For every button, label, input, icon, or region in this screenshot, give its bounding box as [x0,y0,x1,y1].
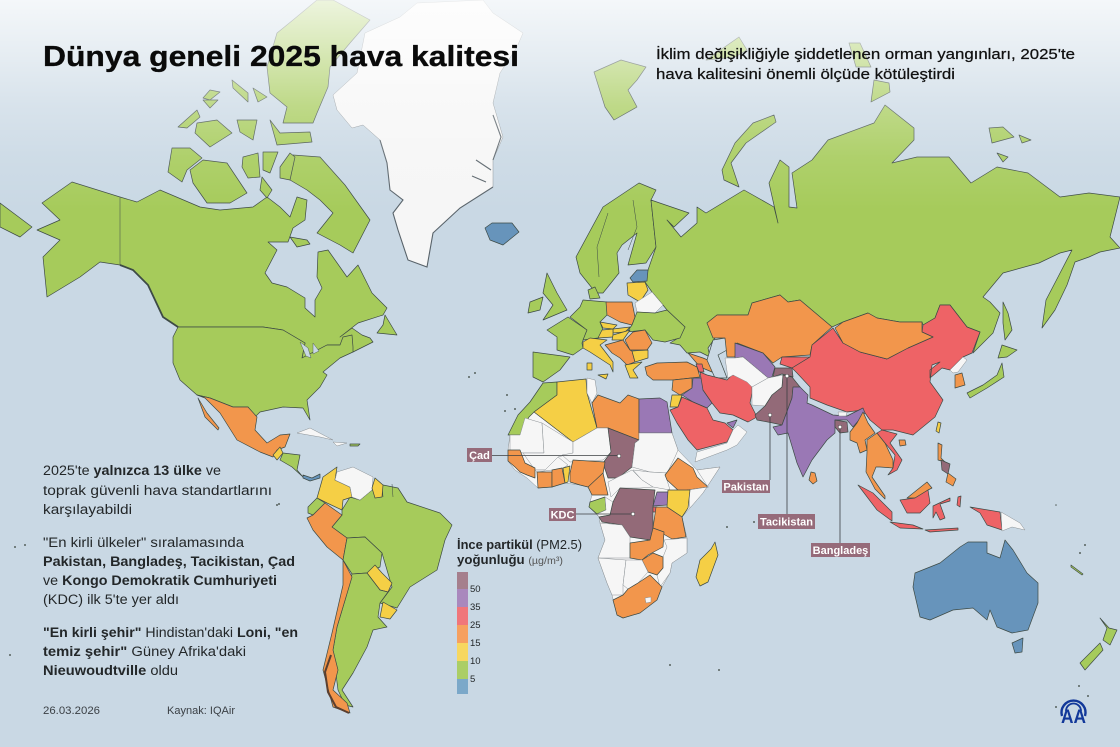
New Caledonia [1071,565,1083,575]
legend [457,537,582,694]
Papua New Guinea [1001,512,1025,531]
Saudi Arabia [670,397,733,450]
Kazakhstan [707,295,832,363]
Tunisia [587,378,597,403]
callout: Bangladeş: Bangladeş [813,545,868,557]
Estonia [630,270,648,282]
Southern Chile fjords [325,655,349,713]
Central African Republic [608,470,653,497]
Bangladesh [835,420,848,433]
Paraguay [367,565,392,592]
Sri Lanka [809,472,817,484]
Peru [307,503,347,560]
Baja California [198,398,219,430]
callout: Pakistan: Pakistan [723,482,769,494]
callout: Çad: Çad [469,450,490,462]
Libya [592,395,639,440]
Tasmania [1012,638,1023,653]
Greenland [333,0,523,267]
Argentina [333,573,388,707]
Papua [970,507,1002,530]
Pakistan [755,375,800,425]
Austria [598,329,613,338]
Ecuador [308,498,325,515]
Hungary [612,330,630,340]
callout: Bangladeş [811,425,870,557]
Slovakia [613,327,630,333]
region: North America [0,0,523,481]
Cuba [297,428,333,440]
Congo [597,497,613,517]
text block: 13 countries: 2025'te yalnızca 13 ülke ve [43,463,221,478]
subtitle [656,45,1075,83]
legend colour scale [457,572,468,694]
Egypt [639,398,672,433]
Venezuela [335,467,373,500]
Sumatra [858,485,892,521]
Kenya [667,490,690,517]
Mauritania [510,418,544,453]
subtitle: hava kalitesini önemli ölçüde kötüleştirdi [656,66,955,83]
legend values: 10 [470,656,481,667]
Chukotka edge [0,203,32,237]
Nordic countries [576,183,656,293]
Taiwan [936,422,941,433]
Java [890,522,923,529]
text block: most polluted countries [43,535,295,607]
Australia [913,540,1038,633]
legend values [470,584,481,685]
Poland [606,302,635,325]
region: Africa [508,378,720,618]
text block: 13 countries [43,463,272,517]
region: Europe [528,37,1120,382]
Zimbabwe [642,553,663,575]
Central America [280,453,303,477]
text block: most polluted and cleanest city: "En kirli şehir" Hindistan'daki Loni, "en [43,625,298,640]
Hainan [899,440,906,446]
Panama [303,474,320,481]
South Africa [613,575,662,618]
legend values: 5 [470,674,475,685]
UAE [727,420,737,428]
Uruguay [380,602,397,619]
callout: KDC [549,508,635,522]
Madagascar [696,542,718,586]
Africa white base [508,412,720,618]
Mali [523,423,573,470]
Chad [603,428,639,478]
Niger [562,428,611,462]
legend title: İnce partikül (PM2.5) [457,537,582,552]
Uzbekistan [735,343,775,378]
Romania [625,330,652,350]
Uganda [653,492,668,506]
Bhutan [838,412,847,416]
Arctic islands [168,0,370,253]
New Zealand [1080,618,1117,670]
Sudan [632,433,678,473]
Kyrgyzstan [780,357,810,368]
Morocco [508,382,557,435]
legend values: 35 [470,602,481,613]
Hudson islands [290,237,310,247]
Mongolia [835,313,933,359]
Vietnam [877,430,902,475]
Nigeria [570,460,605,487]
callout: Tacikistan: Tacikistan [760,516,813,528]
title: Dünya geneli 2025 hava kalitesi [43,41,519,73]
callout: Tacikistan [758,374,815,529]
Alaska panhandle coast [120,265,178,327]
Sakhalin [1003,302,1012,340]
Ghana [552,468,565,487]
Lesser Sunda Islands [925,528,958,532]
callout: Pakistan [722,413,772,494]
Lesotho [645,597,651,603]
Sulawesi [933,498,950,520]
Philippines [938,443,956,486]
legend title: yoğunluğu (µg/m³) [457,552,563,567]
Myanmar [850,412,875,453]
top fade overlay [0,0,1120,210]
Senegal and west coast [508,450,535,478]
Zambia [630,528,664,560]
text block: most polluted and cleanest city [43,625,298,678]
France [547,317,587,355]
Japan [967,345,1017,398]
Namibia [598,558,626,595]
Belarus [635,292,663,313]
United States [173,327,353,420]
text block: most polluted countries: "En kirli ülkeler" sıralamasında [43,535,245,550]
Iran [700,372,757,422]
Malaysian Borneo [907,482,932,498]
text block: most polluted and cleanest city: Nieuwoudtville oldu [43,663,178,678]
Balkans [605,340,635,365]
callout: Çad [467,448,621,462]
Jordan [670,395,682,407]
callout: KDC: KDC [551,510,574,522]
Thailand Laos Cambodia [866,433,893,499]
Guatemala [273,447,283,460]
text block: 13 countries: karşılayabildi [43,502,132,517]
South Sudan [633,470,670,490]
Greenland coast and fjords [380,115,501,267]
Mozambique [657,538,687,587]
Angola [598,523,630,558]
Afghanistan [752,375,783,406]
Newfoundland [377,315,397,335]
region: Oceania [913,540,1117,670]
legend values: 15 [470,638,481,649]
Benin [563,466,570,483]
Mexico [197,395,290,457]
text block: most polluted countries: Pakistan, Bangladeş, Tacikistan, Çad [43,554,295,569]
Denmark [588,287,600,299]
subtitle: İklim değişikliğiyle şiddetlenen orman yangınları, 2025'te [656,45,1075,63]
source: Kaynak: IQAir [167,705,235,717]
Ireland [528,297,543,313]
Germany and Benelux [570,300,607,340]
Turkmenistan [725,357,768,387]
North Korea [950,357,967,373]
Russia [645,105,1120,357]
Colombia [317,467,352,510]
region: South America [307,467,452,713]
China [792,305,980,435]
icon: AA logo: AA [1061,707,1086,728]
Bolivia [343,537,382,574]
Alaska and Canada [37,182,387,358]
Ukraine [627,310,685,342]
South Korea [955,373,965,388]
Brazil and Guianas [332,485,452,608]
Iberia [533,352,570,382]
legend values: 25 [470,620,481,631]
text block: most polluted countries: (KDC) ilk 5'te yer aldı [43,592,179,607]
Burkina Faso region [535,457,568,472]
DR Congo [599,488,655,540]
Gabon [589,497,606,514]
Russian Arctic islands [594,37,1031,187]
Sicily [598,374,608,379]
small islands [9,372,1089,708]
Caspian Sea [707,338,727,378]
Cote d'Ivoire [537,472,552,488]
Greece [625,362,642,378]
Chile [323,560,352,713]
Iceland [485,223,519,245]
region: Asia [645,295,1025,532]
legend title [457,537,582,567]
Czechia [600,322,617,329]
Bulgaria [632,350,648,362]
text block: 13 countries: toprak güvenli hava standartlarını [43,483,272,498]
Tajikistan [773,368,793,377]
Algeria [534,379,597,442]
Guyana [372,478,383,498]
Caucasus [688,353,715,372]
Tanzania [653,507,686,539]
Italy [583,338,613,372]
Moluccas [957,496,961,507]
Puerto Rico [350,444,360,446]
Syria and Lebanon [672,378,692,395]
Iraq [682,378,712,408]
Latvia and Lithuania [627,282,648,302]
Botswana [623,560,648,589]
Hispaniola [333,442,347,446]
Great lakes [300,342,319,358]
Armenia [696,364,704,372]
Sardinia [587,363,592,370]
legend values: 50 [470,584,481,595]
Kalimantan [900,490,930,513]
text block: most polluted and cleanest city: temiz şehir" Güney Afrika'daki [43,644,246,659]
Great Britain [543,273,567,320]
Somalia and Djibouti [688,467,720,508]
Ethiopia [665,458,708,492]
text block: most polluted countries: ve Kongo Demokratik Cumhuriyeti [43,573,277,588]
Yemen and Oman [695,425,747,462]
India [773,387,865,477]
Turkey [645,362,700,380]
Burundi and Rwanda [653,507,657,512]
Cameroon [588,473,608,495]
date: 26.03.2026 [43,705,100,717]
